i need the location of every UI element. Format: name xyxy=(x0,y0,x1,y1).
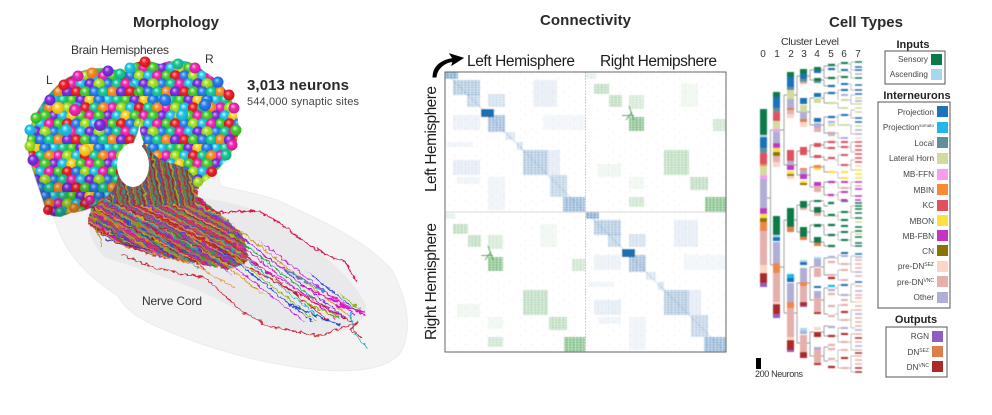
connector lines xyxy=(767,66,828,361)
heading: Right Hemipshere top: Right Hemipshere xyxy=(600,53,717,70)
scale bar xyxy=(755,358,804,379)
legend: Interneurons: pre-DN xyxy=(898,262,924,271)
label: L: L xyxy=(46,73,53,87)
label: Nerve Cord: Nerve Cord xyxy=(142,294,202,308)
level 1 bars xyxy=(773,92,780,318)
cluster level numbers: 0 xyxy=(760,49,766,60)
cluster level numbers: 6 xyxy=(841,49,847,60)
cluster level numbers: 7 xyxy=(855,49,861,60)
cluster level numbers xyxy=(760,49,861,60)
legend: Outputs: RGN xyxy=(911,332,929,341)
legend: Interneurons: Other xyxy=(914,293,934,302)
legend: Interneurons: Projection xyxy=(898,108,934,117)
hole between hemispheres xyxy=(117,143,149,187)
legend: Interneurons xyxy=(878,90,951,308)
heading: Left Hemisphere side: Left Hemisphere xyxy=(423,86,440,192)
heading: Right Hemisphere side: Right Hemisphere xyxy=(423,223,440,340)
cluster level numbers: 4 xyxy=(814,49,820,60)
scale bar: 200 Neurons xyxy=(755,369,804,379)
cluster level numbers: 3 xyxy=(801,49,807,60)
legend: Interneurons: MBIN xyxy=(914,186,934,195)
label: Brain Hemispheres: Brain Hemispheres xyxy=(71,43,169,57)
legend: Interneurons: MB-FBN xyxy=(903,232,934,241)
label: R: R xyxy=(205,52,214,66)
level 7 segments xyxy=(855,62,862,372)
cluster level numbers: 2 xyxy=(788,49,794,60)
legend: Interneurons: VNC xyxy=(923,278,934,284)
legend: Interneurons: KC xyxy=(923,201,934,210)
legend: Outputs xyxy=(886,314,947,377)
level 2 bars xyxy=(787,72,794,352)
legend: Interneurons: Interneurons xyxy=(883,90,951,102)
arrow: matrix reading direction xyxy=(433,54,463,77)
legend: Interneurons: pre-DN xyxy=(897,278,923,287)
legend: Inputs: Ascending xyxy=(890,70,928,79)
nerve cord shell xyxy=(52,165,407,371)
heading: Left Hemisphere top: Left Hemisphere xyxy=(467,53,575,70)
legend: Outputs: Outputs xyxy=(895,314,937,326)
level 4 bars xyxy=(814,67,821,365)
legend: Interneurons: Local xyxy=(914,139,934,148)
title: Connectivity: Connectivity xyxy=(540,12,632,29)
legend: Interneurons: CN xyxy=(922,247,934,256)
legend: Outputs: DN xyxy=(907,363,918,372)
cluster level numbers: 5 xyxy=(828,49,834,60)
legend: Outputs: SEZ xyxy=(919,348,929,354)
legend: Interneurons: MBON xyxy=(909,217,934,226)
level 0 bar xyxy=(760,109,767,287)
level 6 segments xyxy=(841,63,848,368)
label: Cluster Level: Cluster Level xyxy=(781,36,839,48)
legend: Inputs xyxy=(885,39,945,84)
stat: neurons: 3,013 neurons xyxy=(247,77,349,94)
stat: synaptic sites: 544,000 synaptic sites xyxy=(247,96,360,108)
legend: Inputs: Sensory xyxy=(898,55,929,64)
legend: Interneurons: SEZ xyxy=(924,262,934,268)
connectivity matrix xyxy=(445,72,726,352)
right hemisphere spheres xyxy=(124,56,242,187)
legend: Interneurons: Projection xyxy=(883,123,919,132)
level 5 segments xyxy=(828,65,835,367)
legend: Outputs: DN xyxy=(907,348,919,357)
dendrogram xyxy=(760,62,862,372)
legend: Outputs: VNC xyxy=(918,363,929,369)
level 3 bars xyxy=(800,69,807,358)
legend: Inputs: Inputs xyxy=(896,39,930,51)
left hemisphere spheres xyxy=(24,66,141,217)
legend: Interneurons: MB-FFN xyxy=(903,170,934,179)
panel: morphology render xyxy=(24,56,407,371)
title: Morphology: Morphology xyxy=(133,14,220,31)
cluster level numbers: 1 xyxy=(774,49,780,60)
legend: Interneurons: somato xyxy=(919,123,934,128)
legend: Interneurons: Lateral Horn xyxy=(889,154,934,163)
neuron bundle xyxy=(88,140,368,348)
title: Cell Types: Cell Types xyxy=(829,14,903,31)
